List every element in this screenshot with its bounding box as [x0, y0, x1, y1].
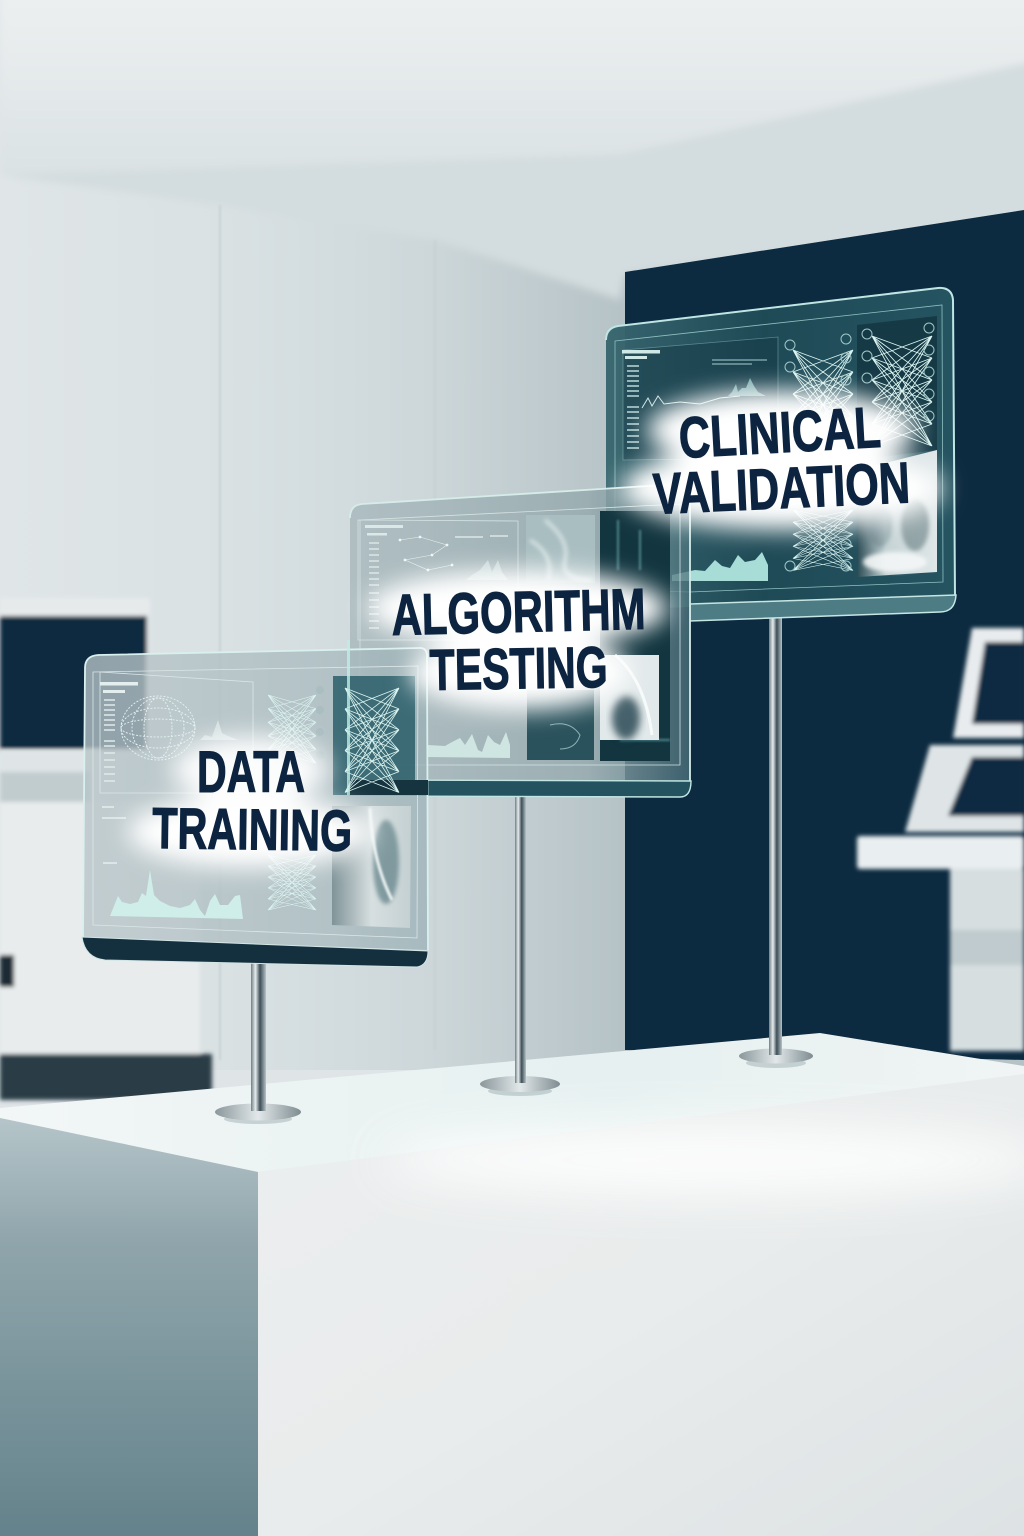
stand: clinical validation — [739, 612, 813, 1068]
label: clinical validation: VALIDATION — [652, 450, 911, 527]
brain wireframe — [121, 696, 195, 760]
label: data training — [128, 736, 372, 868]
label: algorithm testing: ALGORITHM — [391, 577, 646, 648]
panel: data training screen — [82, 640, 428, 967]
line chart — [110, 870, 243, 919]
counter highlight — [380, 1124, 1024, 1196]
left monitor — [0, 598, 150, 753]
chest x-ray image — [600, 655, 659, 740]
counter — [0, 1033, 1024, 1536]
counter front face — [258, 1074, 1024, 1536]
right equipment — [857, 628, 1024, 1051]
left cabinet — [0, 750, 212, 1100]
ceiling soffit — [0, 0, 1024, 300]
caption lines — [102, 807, 126, 863]
counter top surface — [0, 1033, 1024, 1172]
label: data training: DATA — [197, 740, 305, 805]
chest x-ray image — [858, 450, 937, 577]
stand: data training — [215, 960, 301, 1124]
label: clinical validation: CLINICAL — [677, 395, 882, 471]
data block — [358, 520, 518, 640]
lower scan image — [527, 690, 594, 760]
neural network — [268, 686, 324, 910]
dark network image — [333, 640, 428, 795]
dark wall panel — [625, 210, 1024, 1060]
wall seams — [220, 205, 435, 1060]
bottom bar — [690, 595, 956, 621]
panel: clinical validation screen — [606, 288, 956, 621]
inner frame — [615, 305, 943, 592]
scan image — [526, 515, 595, 583]
line chart — [672, 552, 768, 581]
panel: algorithm testing screen — [348, 484, 691, 797]
label: clinical validation — [622, 390, 942, 530]
chest x-ray image — [332, 806, 411, 928]
dark image — [600, 511, 670, 761]
stand: algorithm testing — [480, 790, 560, 1096]
data block — [100, 672, 253, 793]
dark network image — [857, 316, 937, 460]
label: data training: TRAINING — [152, 796, 353, 864]
counter left face — [0, 1118, 258, 1536]
wall — [0, 0, 1024, 1070]
inner frame — [93, 666, 418, 938]
bottom bar — [82, 937, 428, 967]
label: algorithm testing: TESTING — [429, 635, 608, 703]
bottom bar — [348, 780, 691, 797]
bar chart — [428, 732, 510, 758]
inner frame — [360, 504, 680, 765]
neural network left — [785, 334, 853, 571]
background: clinic room — [0, 0, 1024, 1100]
data table block — [622, 337, 778, 460]
label: algorithm testing — [368, 570, 668, 710]
